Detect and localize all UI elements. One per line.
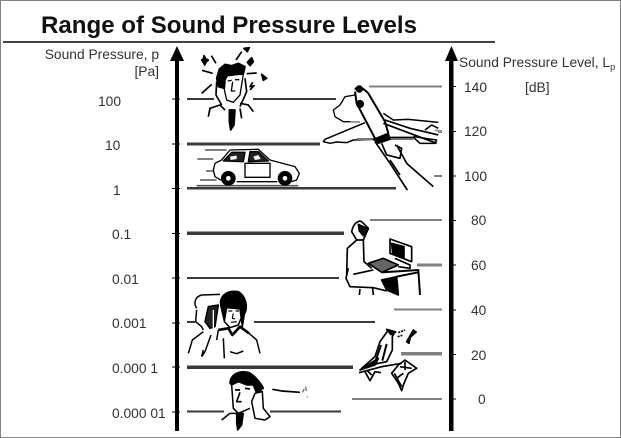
- left axis heading: [Pa]: [134, 64, 159, 79]
- left axis pressure values: 0.01: [112, 272, 139, 287]
- icon: person working at computer: [346, 221, 420, 295]
- icon: man in pain holding head: [202, 48, 267, 130]
- left axis heading: [45, 47, 159, 79]
- right axis decibel values: 100: [464, 169, 487, 184]
- left axis pressure values: 0.1: [112, 227, 131, 242]
- icon: man listening with hand at ear: [222, 372, 308, 430]
- left axis pressure values: 0.001: [112, 316, 147, 331]
- left axis pressure values: [98, 94, 166, 421]
- left axis heading: Sound Pressure, p: [45, 47, 159, 62]
- icon: car: [197, 149, 299, 186]
- icon: singing bird on branch: [359, 329, 417, 391]
- right axis: sound pressure level arrow: [445, 46, 458, 431]
- left axis pressure values: 100: [98, 94, 121, 109]
- right axis decibel values: 40: [471, 303, 487, 318]
- left axis pressure values: 10: [105, 138, 121, 153]
- left pressure level lines: [187, 98, 396, 412]
- icon: airplane taking off with clouds: [323, 86, 442, 190]
- right axis decibel values: 20: [471, 348, 487, 363]
- right level lines: [352, 86, 442, 400]
- left axis pressure values: 0.000 01: [112, 406, 166, 421]
- left axis pressure values: 0.000 1: [112, 361, 158, 376]
- right axis decibel values: 120: [464, 124, 487, 139]
- right axis decibel values: 80: [471, 213, 487, 228]
- right axis heading: [dB]: [525, 80, 550, 95]
- icon: two people whispering: [188, 291, 260, 358]
- right axis heading: [459, 55, 615, 95]
- right axis decibel values: 60: [471, 258, 487, 273]
- right axis decibel values: [464, 80, 487, 407]
- left axis pressure values: 1: [113, 183, 121, 198]
- right axis heading: p: [610, 62, 615, 72]
- right axis decibel values: 140: [464, 80, 487, 95]
- right axis decibel values: 0: [478, 392, 486, 407]
- right axis heading: Sound Pressure Level, L: [459, 55, 610, 70]
- left axis: sound pressure arrow: [170, 46, 184, 431]
- title: Range of Sound Pressure Levels: [41, 12, 417, 39]
